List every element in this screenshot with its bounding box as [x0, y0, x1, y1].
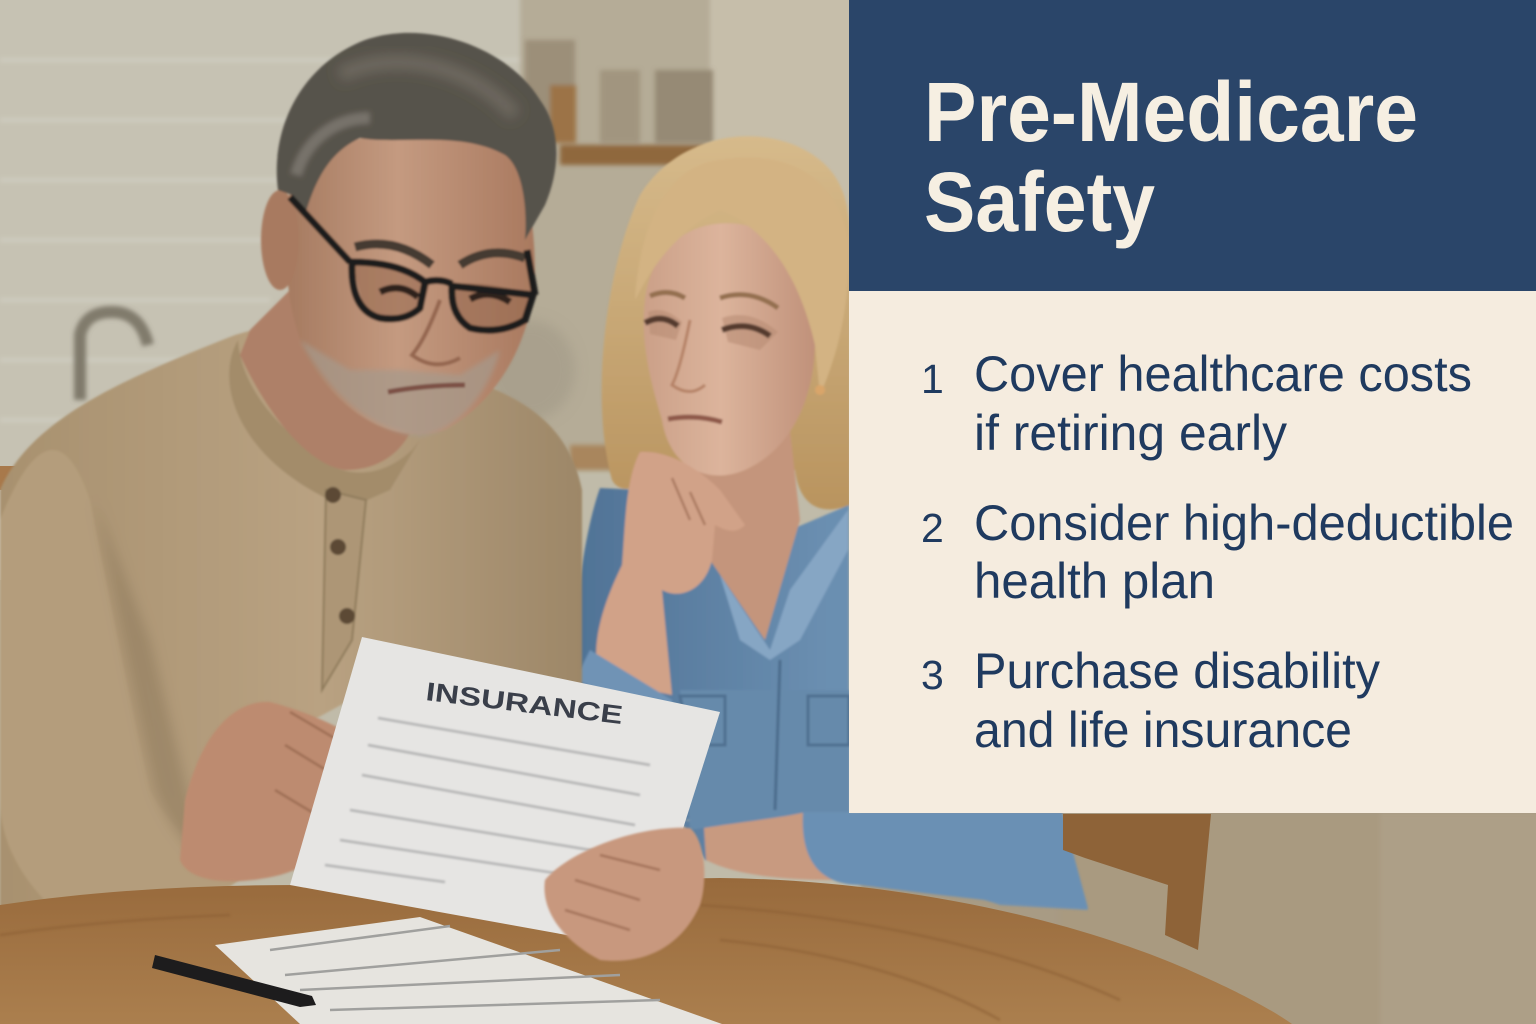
- man: neck: [240, 280, 440, 470]
- background: faucet and counter: [0, 312, 630, 580]
- man: right hand: [544, 828, 704, 961]
- title: [924, 65, 1418, 249]
- list item 3: and life insurance: [974, 702, 1352, 758]
- list item 1: [921, 346, 1472, 461]
- table: [0, 878, 1292, 1024]
- list item 2: health plan: [974, 553, 1215, 609]
- info panel body: [849, 291, 1536, 813]
- list item 1: if retiring early: [974, 405, 1287, 461]
- man: sweater: [0, 325, 582, 1024]
- list item 2: 2: [921, 505, 944, 551]
- list item 3: 3: [921, 652, 944, 698]
- man: glasses: [290, 197, 535, 330]
- woman: hand and forearm: [596, 452, 745, 695]
- list item 3: [921, 643, 1380, 758]
- info panel header: [849, 0, 1536, 291]
- background: shelf with jars: [525, 40, 713, 165]
- document on table: [215, 917, 722, 1024]
- list item 1: 1: [921, 356, 944, 402]
- list item 2: [921, 495, 1514, 609]
- man: hair: [277, 33, 556, 240]
- man: face: [286, 131, 535, 434]
- man: left hand: [180, 702, 385, 881]
- woman: [572, 136, 1088, 910]
- woman: sleeve: [803, 812, 1088, 908]
- pen: [152, 955, 316, 1007]
- title: Safety: [924, 155, 1155, 249]
- man: eye shadows: [352, 261, 530, 328]
- woman: face: [644, 223, 815, 476]
- woman: folded wrist: [704, 812, 850, 880]
- list item 3: Purchase disability: [974, 643, 1380, 699]
- insurance letter: [290, 637, 720, 936]
- man: brows, eyes and mouth: [355, 244, 525, 265]
- woman: eye sockets: [648, 310, 778, 350]
- man: stubble: [300, 340, 500, 437]
- man: sleeve fold shadow: [95, 500, 205, 860]
- woman: eyes and mouth: [645, 319, 770, 336]
- woman: denim shirt: [572, 488, 1088, 910]
- man: [0, 33, 582, 1024]
- man: collar: [229, 340, 420, 510]
- title: Pre-Medicare: [924, 65, 1418, 159]
- list item 2: Consider high-deductible: [974, 495, 1514, 551]
- list item 1: Cover healthcare costs: [974, 346, 1472, 402]
- letter heading: INSURANCE: [424, 676, 624, 730]
- woman: hair back: [602, 136, 850, 509]
- woman: neck: [680, 430, 800, 640]
- chair: [1063, 814, 1211, 950]
